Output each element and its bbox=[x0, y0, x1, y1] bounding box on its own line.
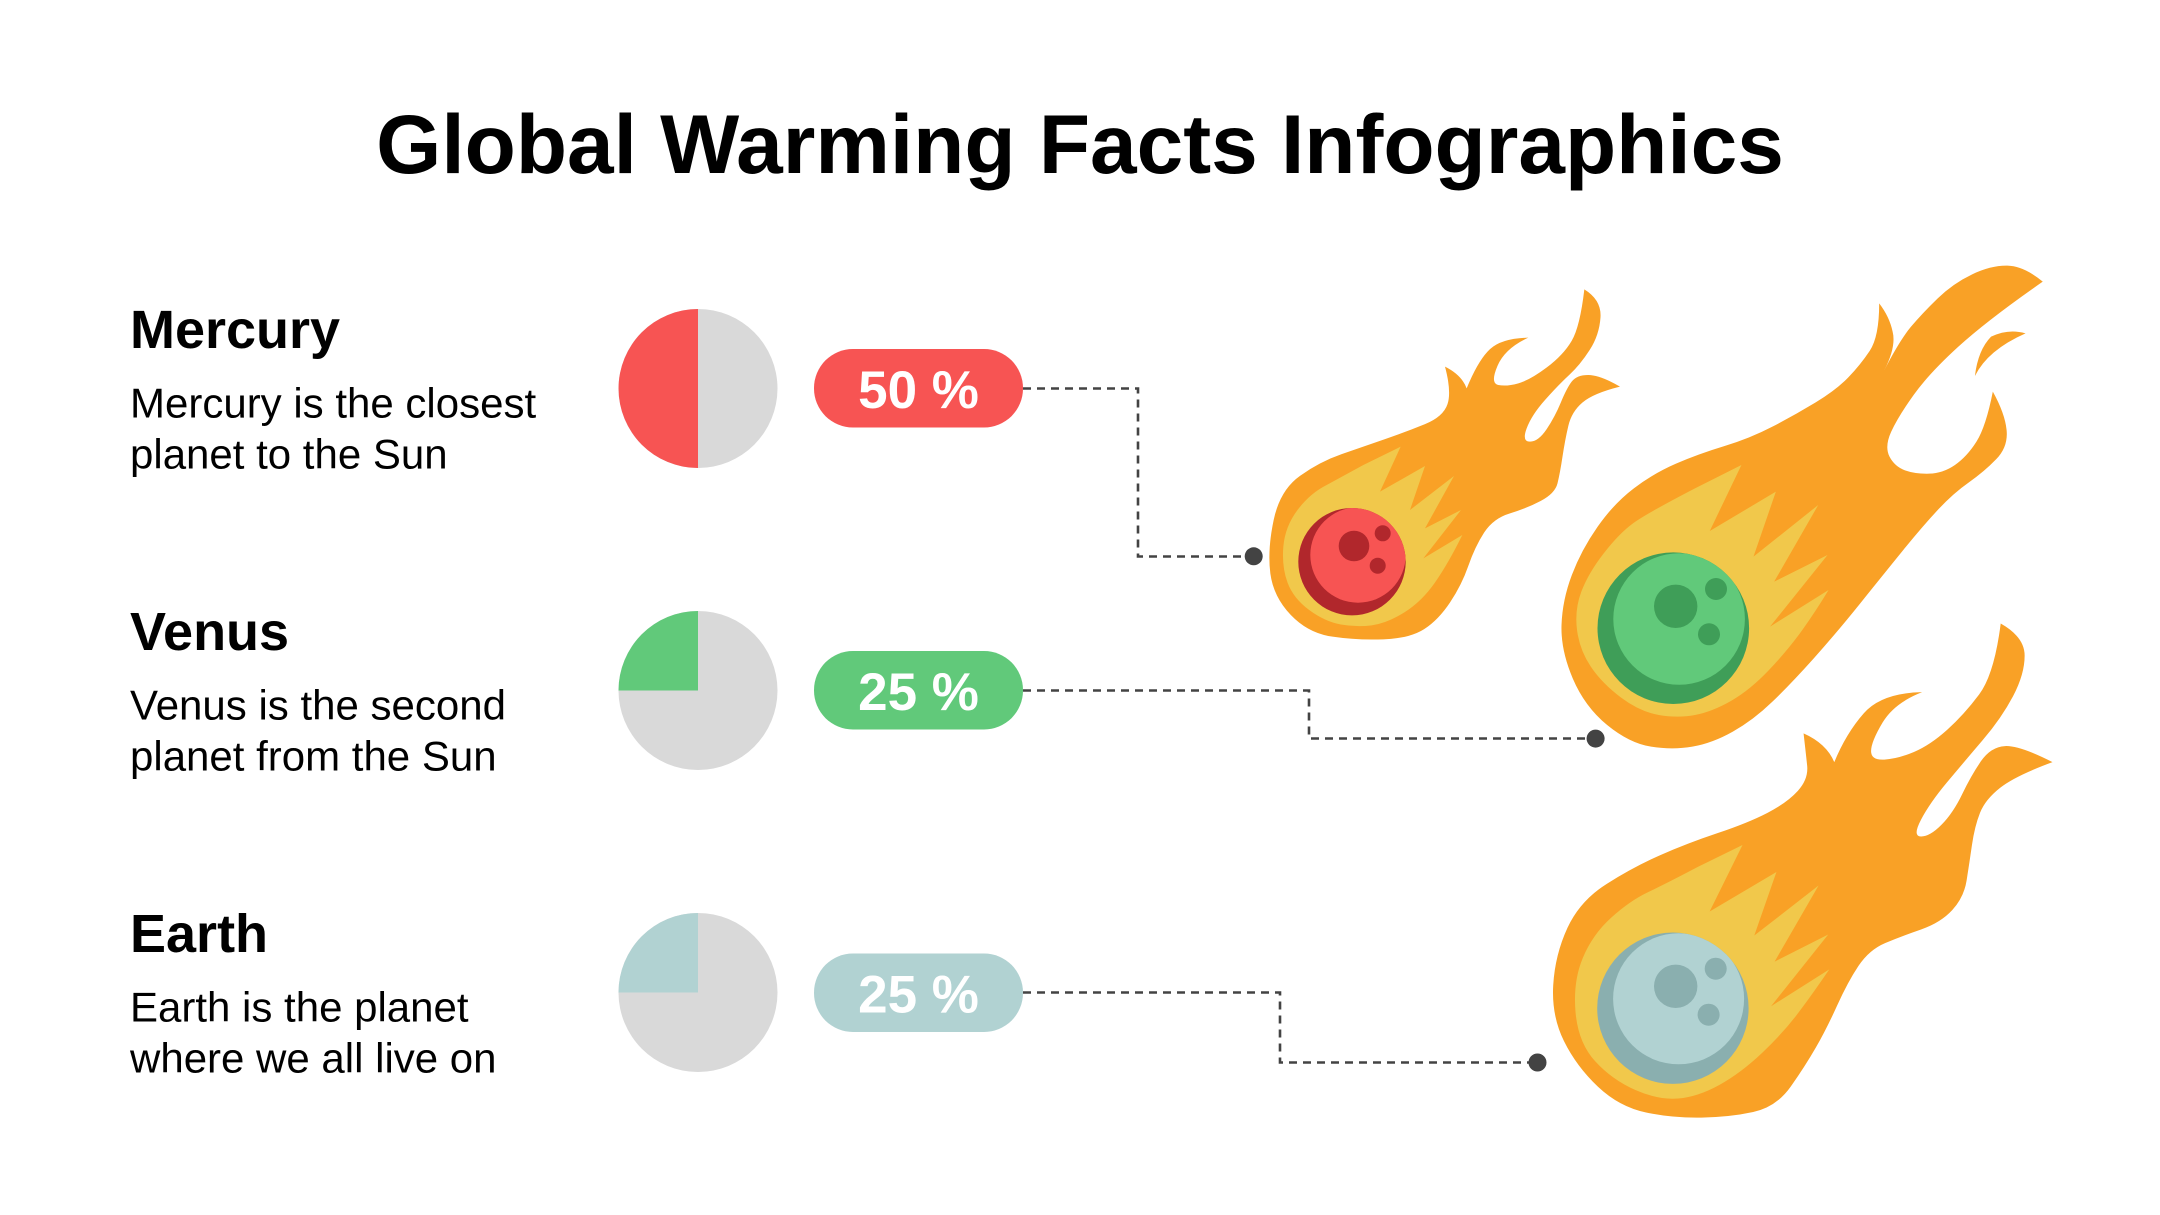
pie chart: Venus 25% bbox=[618, 611, 778, 770]
badge: 25 % green bbox=[814, 651, 1023, 730]
heading: Venus: Venus bbox=[130, 602, 289, 662]
text block: Mercury description: Mercury is the closest bbox=[130, 380, 536, 426]
pie chart: Earth 25% bbox=[618, 913, 778, 1072]
title: Global Warming Facts Infographics bbox=[376, 97, 1784, 191]
text block: Earth description: where we all live on bbox=[129, 1034, 497, 1082]
arrow: Venus connector bbox=[1023, 690, 1605, 748]
badge: 25 % teal bbox=[814, 954, 1023, 1032]
badge: 25 % teal: 25 % bbox=[858, 966, 979, 1024]
badge: 50 % bbox=[814, 349, 1023, 428]
badge: 25 % green: 25 % bbox=[858, 663, 979, 722]
icon: large teal meteor bbox=[1553, 624, 2052, 1118]
text block: Mercury description: planet to the Sun bbox=[130, 430, 448, 478]
pie chart: Mercury 50% bbox=[618, 309, 778, 468]
text block: Venus description: Venus is the second bbox=[130, 682, 506, 728]
text block: Venus description: planet from the Sun bbox=[130, 732, 497, 780]
badge: 50 %: 50 % bbox=[858, 361, 979, 420]
heading: Earth: Earth bbox=[130, 904, 268, 964]
text block: Earth description: Earth is the planet bbox=[130, 984, 469, 1030]
icon: small red meteor bbox=[1269, 289, 1620, 640]
icon: large green meteor bbox=[1561, 266, 2043, 748]
panel: Earth row bbox=[129, 904, 1023, 1082]
panel: Venus row bbox=[130, 602, 1023, 780]
heading: Mercury: Mercury bbox=[130, 300, 340, 360]
arrow: Earth connector bbox=[1023, 992, 1546, 1072]
panel: Mercury row bbox=[130, 300, 1023, 478]
arrow: Mercury connector bbox=[1023, 388, 1263, 565]
